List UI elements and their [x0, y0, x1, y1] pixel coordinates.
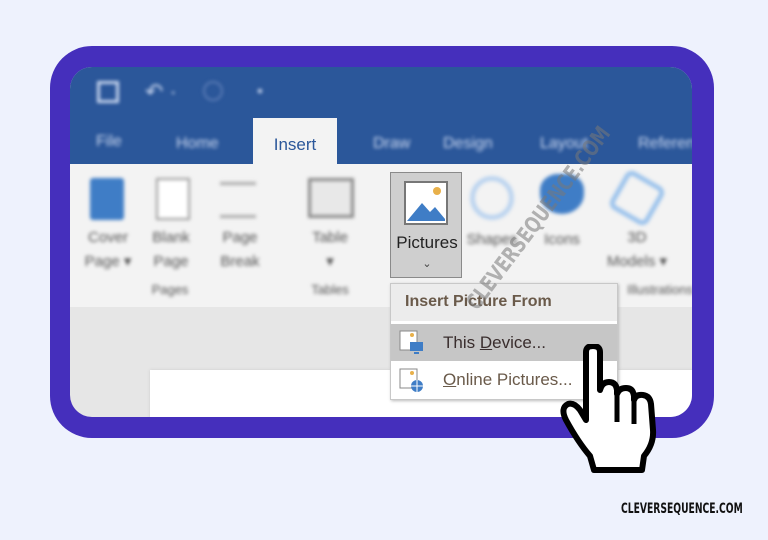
item: online pictures [400, 368, 572, 392]
menu header: Insert Picture From [405, 293, 552, 310]
pictures button: ⌄ [422, 258, 432, 270]
pictures button [390, 172, 462, 278]
ribbon blurred items: Cover [88, 229, 128, 246]
screen panel [70, 67, 692, 417]
tabs [94, 132, 692, 154]
ribbon blurred items [83, 169, 692, 299]
insert tab: Insert [274, 135, 316, 154]
ribbon blurred items: Icons [544, 231, 580, 248]
ribbon blurred items: Table [312, 229, 348, 246]
purple frame [50, 46, 714, 438]
screen panel: Home [176, 135, 219, 152]
ribbon blurred items: Blank [152, 229, 190, 246]
screen panel: Layout [540, 135, 588, 152]
ribbon blurred items: Break [220, 253, 260, 270]
document page [150, 370, 710, 430]
insert tab [253, 118, 337, 168]
quick access icons [94, 78, 264, 106]
title bar [70, 67, 692, 164]
ribbon blurred items: 3D [627, 229, 647, 246]
screen panel: Draw [373, 135, 410, 152]
item: this device: This Device... [443, 333, 546, 352]
dropdown menu [390, 283, 618, 400]
icon: hand cursor [560, 344, 656, 473]
quick access icons: ↶ · [145, 79, 177, 104]
ribbon blurred items: Tables [311, 282, 349, 297]
footer brand: CLEVERSEQUENCE.COM [621, 501, 743, 517]
menu header [391, 284, 617, 321]
item: this device [391, 324, 617, 361]
watermark: CLEVERSEQUENCE.COM [462, 122, 616, 315]
screen panel: Design [443, 135, 493, 152]
ribbon blurred items: Page [222, 229, 258, 246]
ribbon blurred items: Pages [152, 282, 188, 297]
ribbon blurred items: Models ▾ [607, 253, 667, 270]
ribbon blurred items: Illustrations [627, 282, 692, 297]
ribbon blurred items: ▾ [326, 253, 334, 270]
ribbon blurred items: Shapes [467, 231, 517, 248]
ribbon [70, 164, 692, 307]
item: online pictures: Online Pictures... [443, 370, 572, 389]
screen panel: File [96, 133, 122, 150]
pictures button: Pictures [396, 233, 458, 252]
quick access icons: ▪ [257, 83, 263, 100]
ribbon blurred items: Page [153, 253, 189, 270]
icon: picture [404, 181, 448, 225]
ribbon blurred items: Page ▾ [85, 253, 131, 270]
